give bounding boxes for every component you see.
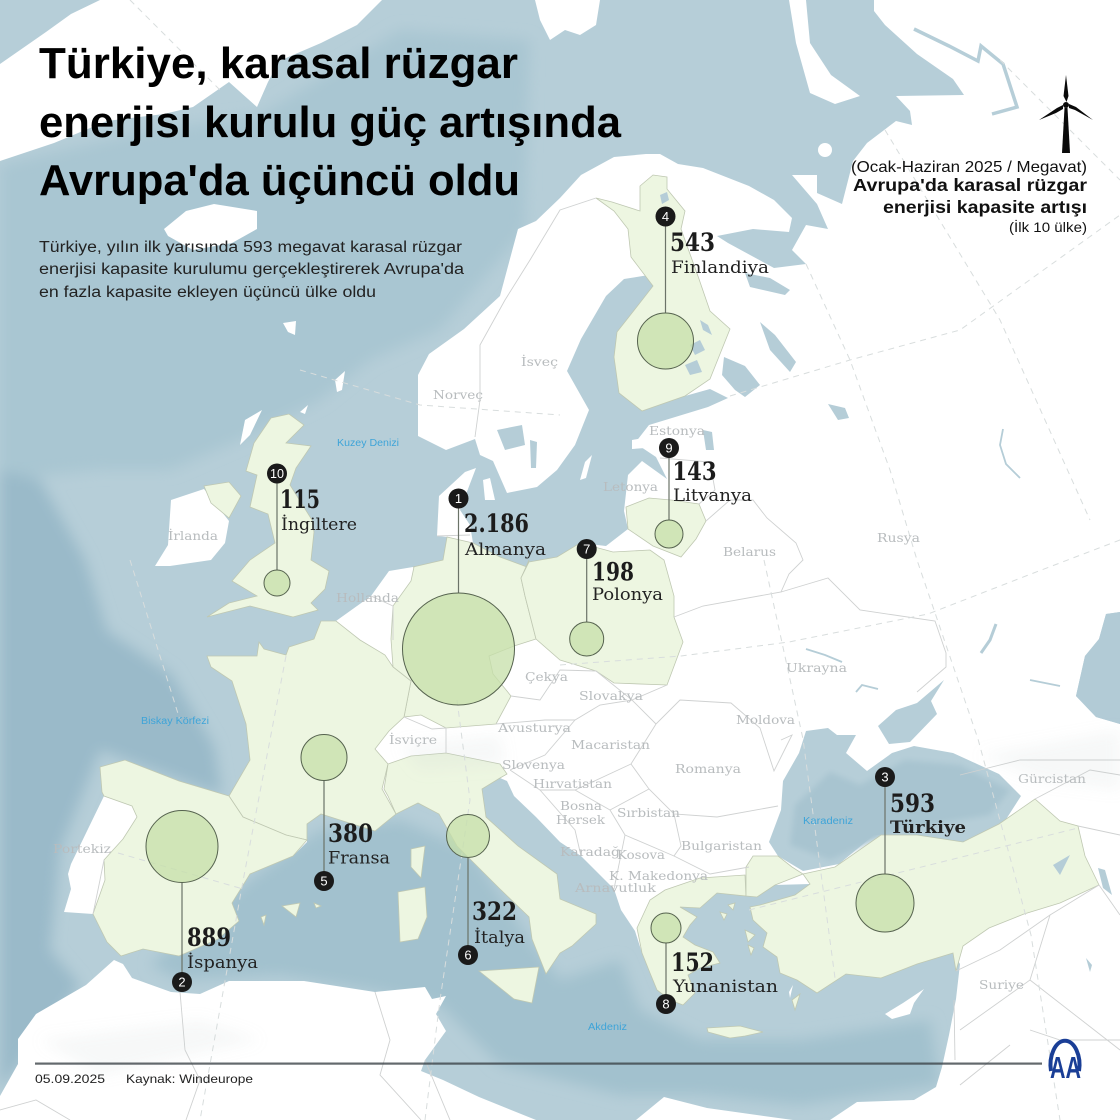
country name labels on map: Belarus xyxy=(723,544,776,559)
marker: 2 İspanya: 889 xyxy=(187,923,231,952)
country name labels on map: Bulgaristan xyxy=(681,838,762,853)
country name labels on map: Slovakya xyxy=(579,688,644,703)
marker: 7 Polonya: 198 xyxy=(592,558,634,586)
marker: 8 Yunanistan: 152 xyxy=(671,948,714,977)
marker: 8 Yunanistan: Yunanistan xyxy=(672,977,778,997)
Türkiye territory xyxy=(750,799,1099,993)
country name labels on map: Kosova xyxy=(617,847,666,862)
rivers xyxy=(806,429,1060,692)
intro text block: en fazla kapasite ekleyen üçüncü ülke oldu xyxy=(39,284,376,301)
marker: 5 Fransa xyxy=(301,734,390,891)
country name labels on map: Karadağ xyxy=(560,844,620,859)
country name labels on map: Romanya xyxy=(675,761,742,776)
country name labels on map: İsviçre xyxy=(389,732,437,747)
footer date and source: Kaynak: Windeurope xyxy=(126,1072,253,1086)
intro text block xyxy=(39,239,464,301)
country name labels on map: Estonya xyxy=(649,423,706,438)
country name labels on map: Hersek xyxy=(556,812,605,827)
marker: 1 Almanya: Almanya xyxy=(464,540,546,560)
marker: 7 Polonya: Polonya xyxy=(592,585,663,605)
legend heading: (İlk 10 ülke) xyxy=(1009,218,1087,235)
country name labels on map: Portekiz xyxy=(53,841,111,856)
marker: 9 Litvanya: 9 xyxy=(665,440,673,456)
footer date and source xyxy=(35,1072,253,1086)
marker: 3 Türkiye: 593 xyxy=(890,789,935,818)
country name labels on map: Slovenya xyxy=(502,757,566,772)
Poland xyxy=(521,543,683,685)
footer rule xyxy=(35,1062,1042,1065)
marker: 9 Litvanya xyxy=(655,438,752,548)
intro text block: enerjisi kapasite kurulumu gerçekleştirerek Avrupa'da xyxy=(39,261,464,278)
sea name labels: Karadeniz xyxy=(803,816,853,827)
marker: 10 İngiltere xyxy=(264,464,357,596)
Italian islands xyxy=(398,846,539,1003)
marker: 10 İngiltere: 115 xyxy=(280,485,320,514)
country name labels on map: Norveç xyxy=(433,387,483,402)
marker: 10 İngiltere: İngiltere xyxy=(281,514,357,535)
marker: 7 Polonya xyxy=(570,539,663,656)
Ireland north and UK xyxy=(207,414,329,617)
terrain shading xyxy=(40,730,1120,1075)
Lithuania xyxy=(626,498,706,557)
Iceland xyxy=(164,204,257,250)
marker: 6 İtalya: 322 xyxy=(472,897,517,926)
Sea of Azov xyxy=(878,680,944,744)
marker: 8 Yunanistan xyxy=(651,913,778,1014)
marker: 5 Fransa: Fransa xyxy=(328,848,390,868)
title: enerjisi kurulu güç artışında xyxy=(39,98,622,147)
Finland xyxy=(596,175,730,411)
title xyxy=(39,39,622,205)
country name labels on map: Bosna xyxy=(560,798,603,813)
Black Sea xyxy=(769,728,1021,871)
marker: 6 İtalya: İtalya xyxy=(474,927,525,948)
country name labels on map xyxy=(53,354,1086,992)
Caspian Sea xyxy=(1076,612,1120,724)
sea name labels: Akdeniz xyxy=(588,1022,627,1033)
legend heading: enerjisi kapasite artışı xyxy=(883,197,1087,217)
country name labels on map: İsveç xyxy=(521,354,558,369)
marker: 3 Türkiye: 3 xyxy=(881,770,889,784)
marker: 2 İspanya: 2 xyxy=(178,974,186,990)
country name labels on map: Ukrayna xyxy=(786,660,848,675)
marker: 4 Finlandiya xyxy=(638,206,769,369)
Greek islands xyxy=(707,903,800,1038)
marker: 1 Almanya: 2.186 xyxy=(464,509,529,538)
title: Avrupa'da üçüncü oldu xyxy=(39,156,520,205)
sea name labels xyxy=(141,438,853,1033)
legend heading: Avrupa'da karasal rüzgar xyxy=(853,175,1087,195)
small islands xyxy=(155,143,924,1019)
country name labels on map: Arnavutluk xyxy=(574,880,656,895)
France xyxy=(207,621,411,840)
marker: 10 İngiltere: 10 xyxy=(270,466,284,481)
Italy xyxy=(384,753,596,974)
footer date and source: 05.09.2025 xyxy=(35,1072,105,1086)
marker: 3 Türkiye: Türkiye xyxy=(890,818,966,838)
marker: 9 Litvanya: Litvanya xyxy=(673,486,752,506)
country name labels on map: Hollanda xyxy=(336,590,400,605)
Svalbard xyxy=(535,0,600,40)
marker: 3 Türkiye xyxy=(856,767,966,932)
country name labels on map: Macaristan xyxy=(571,737,650,752)
marker: 4 Finlandiya: Finlandiya xyxy=(671,258,769,278)
Greenland xyxy=(0,0,382,161)
intro text block: Türkiye, yılın ilk yarısında 593 megavat karasal rüzgar xyxy=(39,239,462,256)
country name labels on map: Gürcistan xyxy=(1018,771,1086,786)
marker: 8 Yunanistan: 8 xyxy=(662,996,670,1012)
Thrace xyxy=(746,856,803,897)
northern strait xyxy=(914,29,1017,114)
marker: 4 Finlandiya: 4 xyxy=(662,209,669,224)
marker: 2 İspanya xyxy=(146,810,258,992)
title: Türkiye, karasal rüzgar xyxy=(39,39,518,88)
marker: 7 Polonya: 7 xyxy=(583,542,590,556)
Africa north coast xyxy=(0,960,536,1120)
Germany xyxy=(391,537,536,728)
icon: AA logo: AA xyxy=(1050,1050,1081,1085)
lakes xyxy=(497,192,1112,972)
country name labels on map: Hırvatistan xyxy=(533,776,612,791)
Novaya Zemlya xyxy=(789,0,860,104)
marker: 1 Almanya: 1 xyxy=(455,491,462,506)
marker: 2 İspanya: İspanya xyxy=(187,952,258,973)
icon: wind turbine xyxy=(1039,75,1093,153)
country name labels on map: Suriye xyxy=(979,977,1024,992)
country name labels on map: Sırbistan xyxy=(617,805,680,820)
country name labels on map: Rusya xyxy=(877,530,921,545)
country name labels on map: Letonya xyxy=(603,479,659,494)
marker: 9 Litvanya: 143 xyxy=(672,457,716,486)
legend heading xyxy=(851,159,1087,235)
marker: 5 Fransa: 380 xyxy=(328,819,373,848)
sea name labels: Kuzey Denizi xyxy=(337,438,399,449)
Spain xyxy=(93,760,307,956)
country name labels on map: Çekya xyxy=(525,669,569,684)
Greece xyxy=(637,875,746,1005)
country name labels on map: İrlanda xyxy=(168,528,219,543)
marker: 4 Finlandiya: 543 xyxy=(670,228,715,257)
marker: 6 İtalya xyxy=(446,814,525,965)
marker: 5 Fransa: 5 xyxy=(320,874,328,888)
country name labels on map: Avusturya xyxy=(497,720,572,735)
sea name labels: Biskay Körfezi xyxy=(141,716,209,727)
marker: 6 İtalya: 6 xyxy=(464,948,472,962)
Balearic islands xyxy=(261,903,321,925)
marker: 1 Almanya xyxy=(402,488,546,705)
icon: AA logo xyxy=(1050,1041,1081,1085)
country name labels on map: Moldova xyxy=(736,712,796,727)
country name labels on map: K. Makedonya xyxy=(609,868,709,883)
legend heading: (Ocak-Haziran 2025 / Megavat) xyxy=(851,159,1087,176)
